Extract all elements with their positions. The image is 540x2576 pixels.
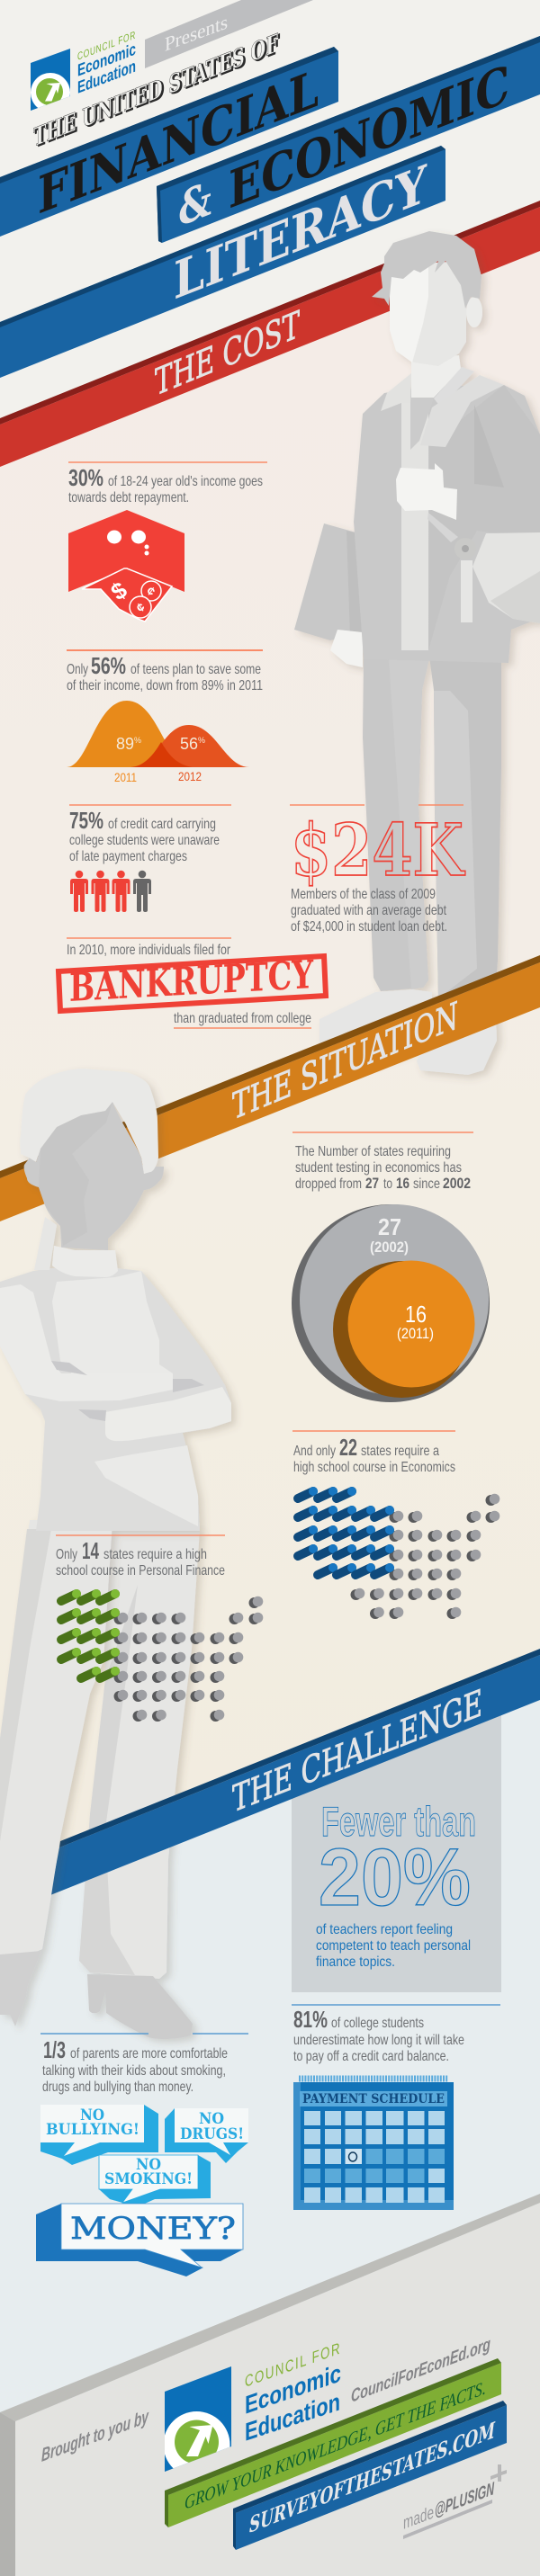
stat: 81 percent underestimate: 81% xyxy=(293,2006,328,2033)
ribbon: surveyofthestates.com xyxy=(233,2401,507,2550)
stat: 14 states personal finance course: Only xyxy=(56,1547,77,1562)
stat: 22 states economics course: states require a xyxy=(361,1444,439,1459)
stat: 14 states personal finance course: school course in Personal Finance xyxy=(56,1563,225,1579)
ear xyxy=(466,297,482,327)
presents ribbon: Presents xyxy=(165,11,228,56)
icon: pocket with money: $ xyxy=(105,576,132,605)
hair xyxy=(372,231,482,309)
stat: testing in economics: 2002 xyxy=(443,1176,471,1192)
icon: people three of four xyxy=(70,871,151,912)
stat: 30 percent debt repayment xyxy=(68,462,267,505)
neck xyxy=(411,355,461,398)
waist highlight xyxy=(94,1445,198,1526)
title word: ampersand: & xyxy=(178,169,212,238)
band: the situation xyxy=(0,955,540,1221)
stat: one third of parents: 1/3 xyxy=(43,2036,66,2063)
stat: 75 percent unaware of late charges: college students were unaware xyxy=(69,833,220,848)
stat: 75 percent unaware of late charges xyxy=(69,805,231,864)
stat: testing in economics: to xyxy=(383,1176,392,1192)
stat: 75 percent unaware of late charges: 75% xyxy=(69,807,104,834)
bubble: no bullying: NO xyxy=(80,2106,104,2124)
stat: testing in economics: 16 xyxy=(396,1176,410,1192)
chart: savings bells 2011 vs 2012: % xyxy=(134,736,141,745)
stat: 81 percent underestimate: to pay off a credit card balance. xyxy=(293,2049,449,2064)
stat: 75 percent unaware of late charges: of late payment charges xyxy=(69,849,187,864)
jacket xyxy=(354,385,540,663)
stat: 22 states economics course xyxy=(292,1431,455,1475)
right trouser leg xyxy=(429,657,501,998)
stat: 24k student debt xyxy=(290,805,465,935)
folder xyxy=(294,523,365,640)
credit: made at plusign: @PLUSIGN xyxy=(435,2478,495,2521)
hair strand at neck xyxy=(34,1217,57,1270)
boot xyxy=(87,1974,193,2039)
title: the united states of xyxy=(33,28,280,154)
bag xyxy=(472,532,540,623)
bubble: no drugs xyxy=(165,2108,248,2163)
stat: 14 states personal finance course: states require a high xyxy=(104,1547,207,1562)
stat: 24k student debt: $24K xyxy=(291,808,465,892)
bubble: no bullying xyxy=(40,2105,158,2165)
icon: pocket with money: ¢ xyxy=(133,599,148,615)
hair xyxy=(20,1069,158,1174)
stat: testing in economics xyxy=(292,1132,473,1192)
band: and economic xyxy=(157,36,540,243)
chart: nested circles 27 and 16: (2002) xyxy=(370,1239,409,1256)
logo: council for economic education: COUNCIL FOR xyxy=(77,29,136,63)
stat: 75 percent unaware of late charges: of credit card carrying xyxy=(108,817,216,832)
stat: 56 percent of teens plan to save: Only xyxy=(67,662,88,677)
shoes xyxy=(320,989,432,1079)
figure: woman body xyxy=(0,1069,231,2026)
stat: 56 percent of teens plan to save: of teens plan to save some xyxy=(130,662,261,677)
bubble: no drugs: NO xyxy=(199,2110,224,2128)
collar xyxy=(381,373,411,411)
stat: 22 states economics course: high school course in Economics xyxy=(293,1460,455,1475)
chart: nested circles 27 and 16: (2011) xyxy=(397,1325,434,1342)
stat: 56 percent of teens plan to save: 56% xyxy=(91,652,126,679)
chart: savings bells 2011 vs 2012: 2011 xyxy=(114,770,137,784)
chart: nested circles 27 and 16 xyxy=(292,1204,490,1402)
title word: literacy: LITERACY xyxy=(174,152,428,311)
stat: 24k student debt: Members of the class of 2009 xyxy=(291,887,436,902)
buckle xyxy=(454,538,476,559)
stat: 22 states economics course: 22 xyxy=(339,1434,357,1461)
left boot xyxy=(0,1951,41,2026)
stat: 30 percent debt repayment: of 18-24 year old's income goes xyxy=(108,474,263,489)
background: challenge section xyxy=(0,1695,540,2576)
map: economics states dots xyxy=(298,1487,500,1619)
upper sleeve xyxy=(0,1284,173,1401)
hand on strap xyxy=(396,463,457,520)
stat: 14 states personal finance course: 14 xyxy=(82,1537,99,1564)
bubble: money: MONEY? xyxy=(70,2211,236,2247)
stat: testing in economics: The Number of states requiring xyxy=(295,1144,451,1159)
map: personal finance states dots xyxy=(61,1589,263,1722)
stat: testing in economics: since xyxy=(413,1176,440,1192)
calendar: payment schedule xyxy=(293,2079,454,2210)
stat: 30 percent debt repayment: towards debt repayment. xyxy=(68,490,189,505)
chart: savings bells 2011 vs 2012: 2012 xyxy=(178,769,202,783)
stat: one third of parents: of parents are more comfortable xyxy=(70,2046,228,2062)
stat: one third of parents xyxy=(40,2034,248,2095)
chart: savings bells 2011 vs 2012 xyxy=(67,701,249,784)
band: the challenge xyxy=(50,1649,540,1895)
arm shadows xyxy=(51,1361,87,1375)
stat: 22 states economics course: And only xyxy=(293,1444,336,1459)
collar xyxy=(52,1246,118,1277)
title word: financial: FINANCIAL xyxy=(38,58,319,227)
stat: testing in economics: dropped from xyxy=(295,1176,362,1192)
left leg xyxy=(0,1520,112,1954)
stat: 56 percent of teens plan to save xyxy=(67,650,263,693)
footer text: brought to you by: Brought to you by xyxy=(41,2404,149,2466)
shirt xyxy=(401,403,428,650)
hand holding folder xyxy=(330,630,363,667)
logo: council for economic education: Economic xyxy=(77,40,136,81)
bag strap xyxy=(420,375,504,447)
credit: made at plusign xyxy=(403,2464,507,2539)
footer logo: council for economic education xyxy=(164,2339,341,2478)
icon: pocket with money xyxy=(68,510,184,622)
stat: 56 percent of teens plan to save: of their income, down from 89% in 2011 xyxy=(67,678,263,693)
bubble: no drugs: DRUGS! xyxy=(180,2125,244,2143)
stat: 14 states personal finance course xyxy=(56,1535,225,1579)
stat: one third of parents: drugs and bullying than money. xyxy=(42,2080,194,2095)
stat: 81 percent underestimate: underestimate how long it will take xyxy=(293,2033,464,2048)
heading: the cost: THE COST xyxy=(155,302,300,406)
figure: woman right leg xyxy=(79,1529,200,2039)
chart: savings bells 2011 vs 2012: % xyxy=(198,736,205,745)
bubble: no smoking xyxy=(99,2155,211,2210)
lower sleeve xyxy=(105,1387,231,1441)
stat: 24k student debt: graduated with an average debt xyxy=(291,903,446,918)
chart: nested circles 27 and 16: 16 xyxy=(405,1301,427,1328)
bubble: no smoking: NO xyxy=(136,2156,161,2174)
heading: the situation: THE SITUATION xyxy=(232,994,458,1130)
gray panel: fewer than 20 percent: 20% xyxy=(319,1833,471,1923)
chart: savings bells 2011 vs 2012: 56 xyxy=(180,735,198,753)
credit: made at plusign: made xyxy=(403,2502,434,2534)
stat: testing in economics: 27 xyxy=(365,1176,379,1192)
gray panel: fewer than 20 percent: finance topics. xyxy=(316,1954,395,1970)
gray panel: fewer than 20 percent: competent to teach personal xyxy=(316,1938,471,1954)
gray panel: fewer than 20 percent: Fewer than xyxy=(321,1798,476,1845)
face and neck xyxy=(24,1102,164,1250)
figure: man with bag and folder xyxy=(294,231,540,1079)
bubble: money xyxy=(36,2204,243,2276)
gray panel: fewer than 20 percent xyxy=(292,1704,501,1992)
back and torso silhouette xyxy=(0,1268,231,1531)
stat: testing in economics: student testing in economics has xyxy=(295,1160,462,1176)
background: cost and situation sections xyxy=(0,234,540,1925)
footer panel xyxy=(0,2194,540,2576)
stat: 24k student debt: of $24,000 in student loan debt. xyxy=(291,919,447,935)
stat: one third of parents: talking with their kids about smoking, xyxy=(42,2063,226,2079)
stat: 81 percent underestimate: of college students xyxy=(331,2016,424,2031)
bubble: no bullying: BULLYING! xyxy=(46,2121,140,2139)
stat: bankruptcy stamp: BANKRUPTCY xyxy=(69,953,314,1011)
calendar: payment schedule: PAYMENT SCHEDULE xyxy=(302,2092,445,2106)
stat: 81 percent underestimate xyxy=(292,2005,500,2064)
left trouser leg xyxy=(363,657,429,991)
chest xyxy=(52,1271,173,1394)
stat: bankruptcy stamp: than graduated from college xyxy=(174,1011,311,1026)
logo: council for economic education: Education xyxy=(77,57,136,98)
logo: council for economic education xyxy=(31,29,136,112)
footer logo: council for economic education: Economic xyxy=(245,2359,341,2420)
footer logo: council for economic education: Education xyxy=(245,2388,340,2447)
footer logo: council for economic education: COUNCIL FOR xyxy=(245,2339,341,2391)
band: the cost xyxy=(0,201,540,467)
gray panel: fewer than 20 percent: of teachers report feeling xyxy=(316,1922,453,1937)
band: financial xyxy=(0,47,338,237)
stat: bankruptcy stamp xyxy=(58,938,326,1028)
chart: savings bells 2011 vs 2012: 89 xyxy=(116,735,134,753)
chart: nested circles 27 and 16: 27 xyxy=(378,1213,401,1240)
band: literacy xyxy=(0,146,446,378)
stat: bankruptcy stamp: In 2010, more individuals filed for xyxy=(67,943,231,958)
presents ribbon xyxy=(145,0,313,68)
bubble: no smoking: SMOKING! xyxy=(104,2170,193,2188)
stat: 30 percent debt repayment: 30% xyxy=(68,464,104,491)
face xyxy=(390,261,466,366)
icon: pocket with money: ¢ xyxy=(144,583,158,599)
